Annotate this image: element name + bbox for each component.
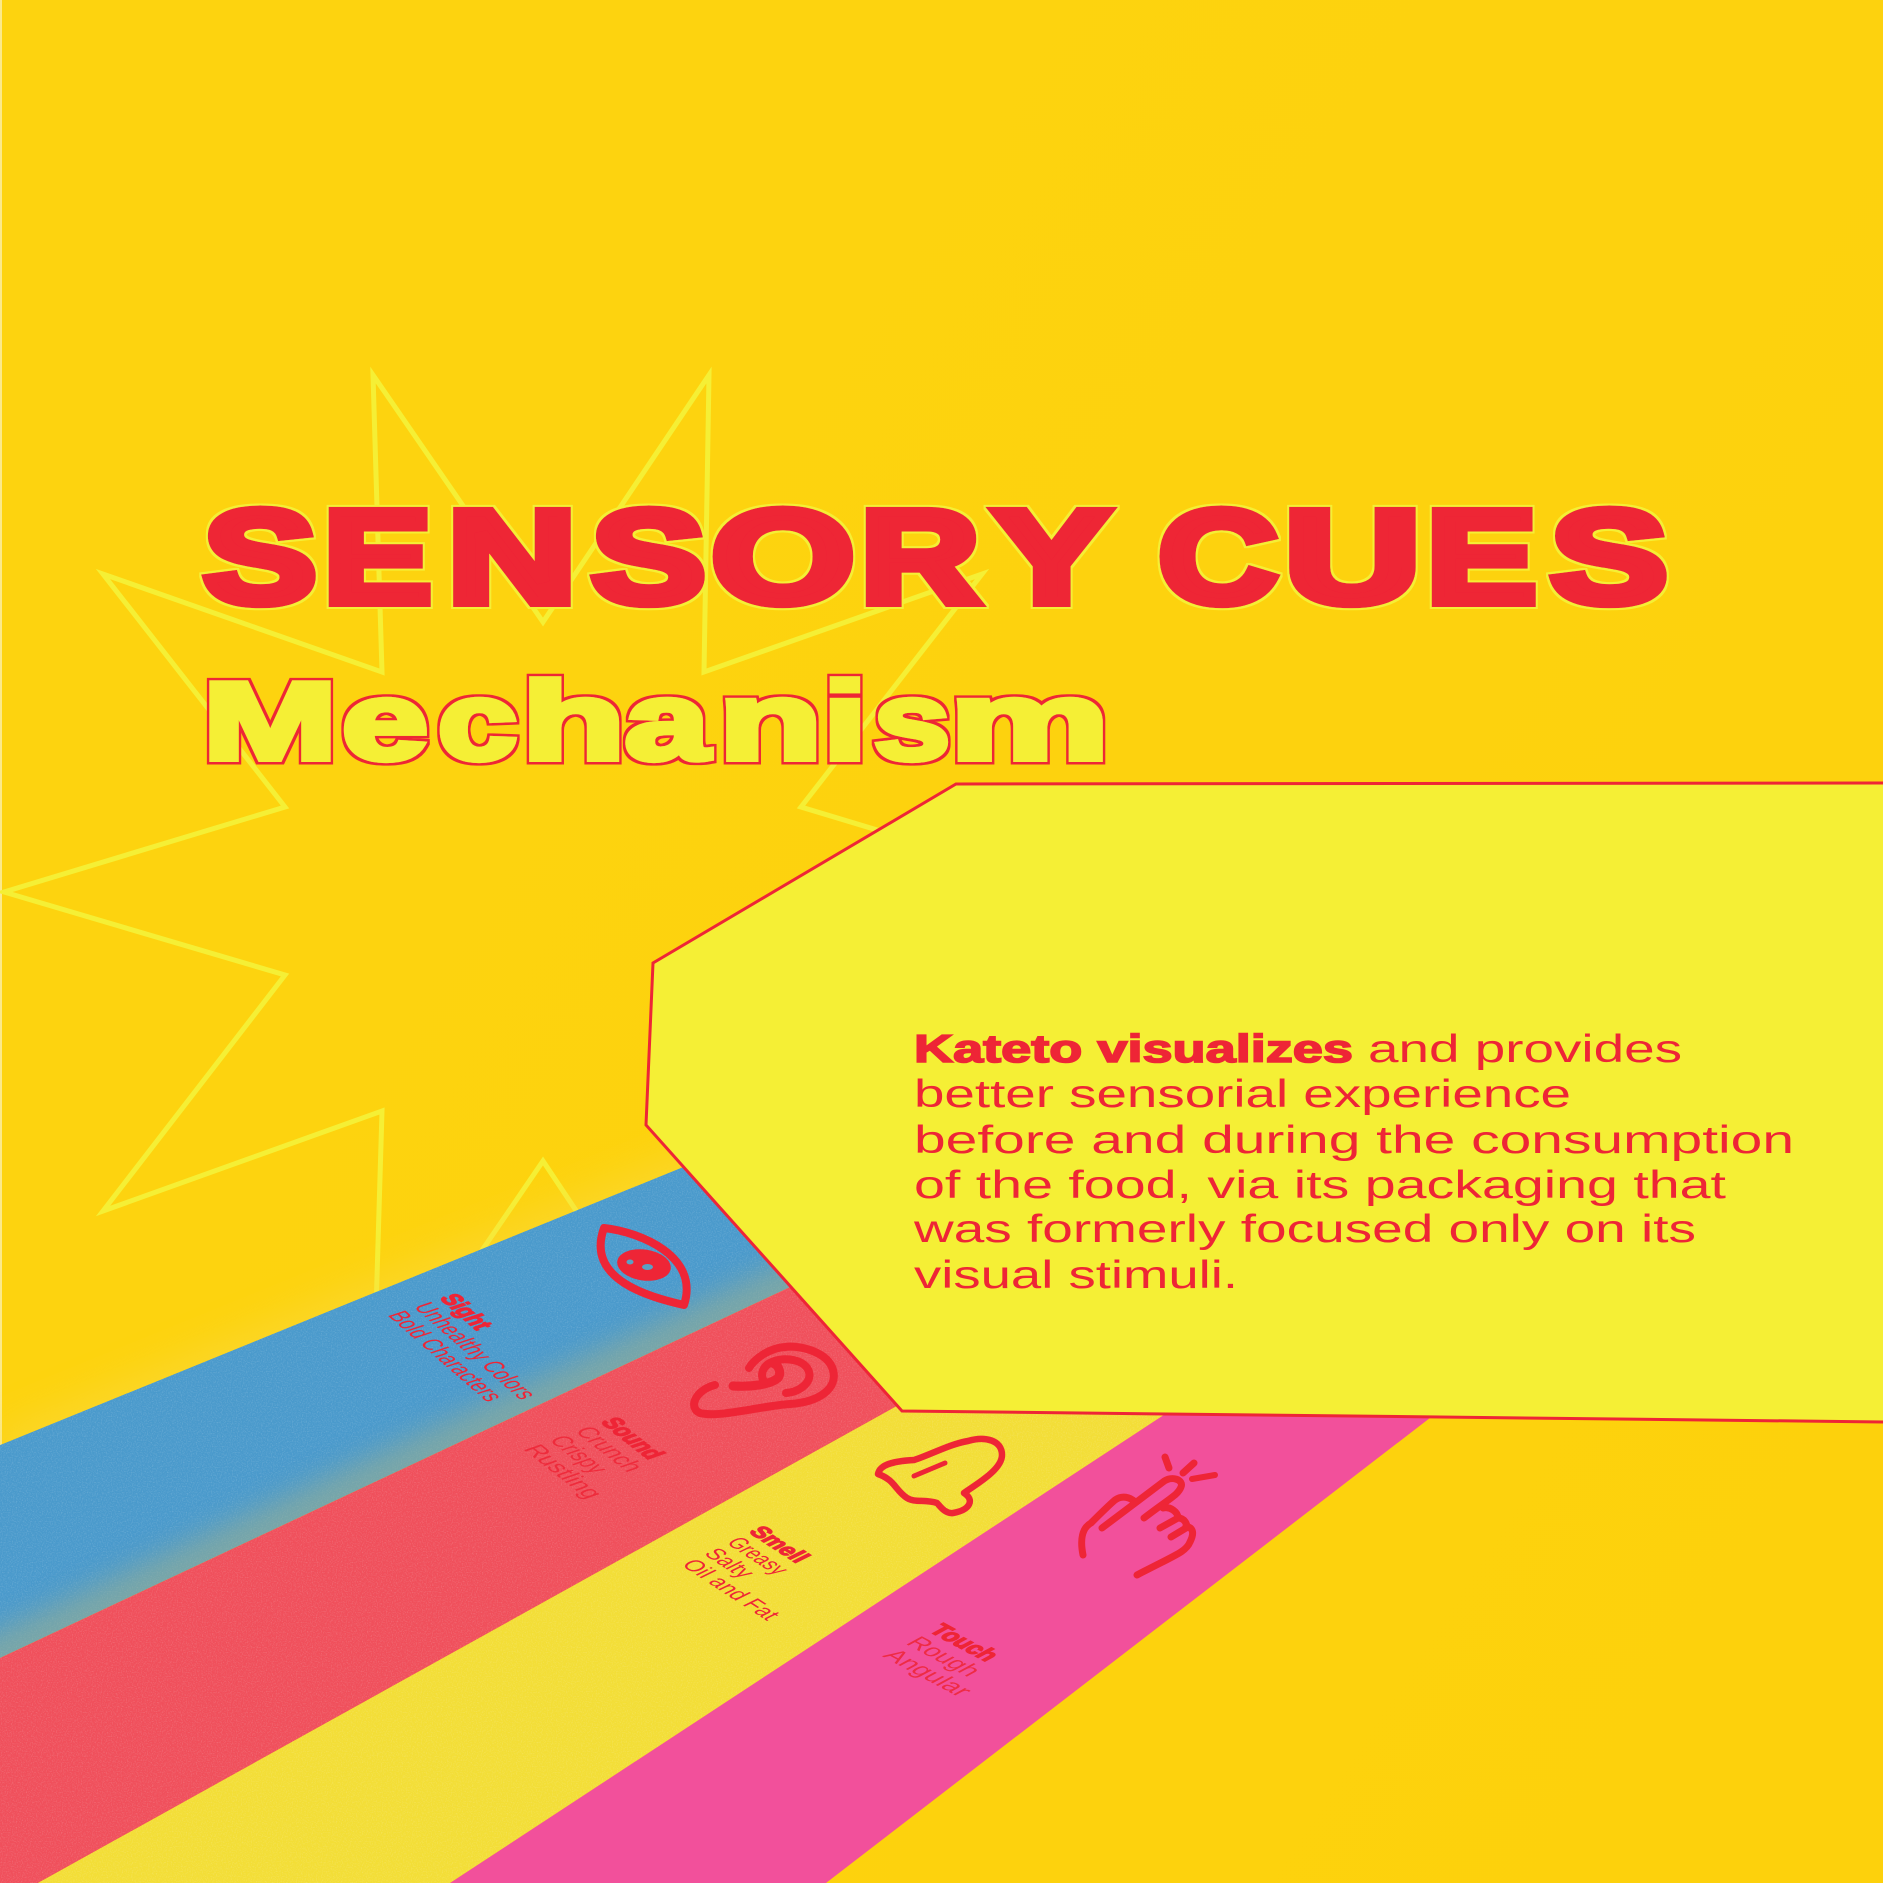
icon: nose xyxy=(878,1439,1002,1513)
title: sensory cues: O xyxy=(712,483,854,630)
label: sound: Sound xyxy=(594,1415,670,1462)
title: sensory cues: U xyxy=(1285,483,1420,630)
label: touch: Angular xyxy=(877,1645,980,1700)
label: smell: Oil and Fat xyxy=(676,1556,787,1624)
description text: was formerly focused only on its xyxy=(913,1208,1696,1251)
starburst outline xyxy=(4,375,1082,1410)
subtitle: mechanism: M xyxy=(203,660,337,783)
label: sound xyxy=(517,1415,686,1502)
subtitle: mechanism: e xyxy=(342,660,428,783)
description text: Kateto visualizes xyxy=(914,1028,1353,1071)
subtitle: mechanism: a xyxy=(625,660,710,783)
label: touch: Rough xyxy=(900,1633,988,1680)
subtitle: mechanism: h xyxy=(522,660,625,783)
subtitle: mechanism: s xyxy=(874,660,950,783)
subtitle: mechanism: n xyxy=(719,660,822,783)
subtitle: mechanism: i xyxy=(823,660,867,783)
title: sensory cues: Y xyxy=(994,483,1107,630)
icon: eye xyxy=(601,1228,687,1305)
title: sensory cues: C xyxy=(1159,483,1277,630)
strip: touch xyxy=(450,1364,1500,1883)
title: sensory cues: E xyxy=(324,483,431,630)
label: sight: Bold Characters xyxy=(381,1308,508,1404)
title: sensory cues: E xyxy=(1427,483,1536,630)
label: touch: Touch xyxy=(923,1620,1006,1665)
title: sensory cues: N xyxy=(448,483,576,630)
description text: better sensorial experience xyxy=(914,1073,1571,1116)
subtitle: mechanism: c xyxy=(438,660,517,783)
label: touch xyxy=(877,1620,1026,1700)
panel: description callout xyxy=(646,783,1883,1422)
description text: of the food, via its packaging that xyxy=(914,1164,1726,1207)
label: smell: Greasy xyxy=(721,1534,796,1578)
label: sound: Crunch xyxy=(568,1424,649,1475)
label: sight: Unhealthy Colors xyxy=(407,1300,542,1402)
label: smell xyxy=(676,1523,854,1624)
label: smell: Salty xyxy=(698,1545,761,1582)
title: sensory cues: S xyxy=(592,483,705,630)
title: sensory cues: S xyxy=(1551,483,1667,630)
title: sensory cues: R xyxy=(861,483,979,630)
label: sight: Sight xyxy=(433,1291,498,1333)
description text: and provides xyxy=(1368,1028,1682,1071)
soft glow above strips xyxy=(0,1145,820,1650)
description text: before and during the consumption xyxy=(914,1119,1794,1162)
strip: smell xyxy=(38,1365,1240,1883)
strip: sound xyxy=(0,1273,960,1883)
icon: snapping hand xyxy=(1082,1457,1215,1575)
icon: ear xyxy=(694,1347,834,1414)
title: sensory cues: S xyxy=(204,483,316,630)
strip: sight xyxy=(0,1168,790,1658)
subtitle: mechanism: m xyxy=(950,660,1109,783)
label: smell: Smell xyxy=(743,1523,816,1566)
label: sound: Rustling xyxy=(517,1442,608,1502)
description text: visual stimuli. xyxy=(914,1254,1238,1297)
label: sound: Crispy xyxy=(542,1433,614,1477)
